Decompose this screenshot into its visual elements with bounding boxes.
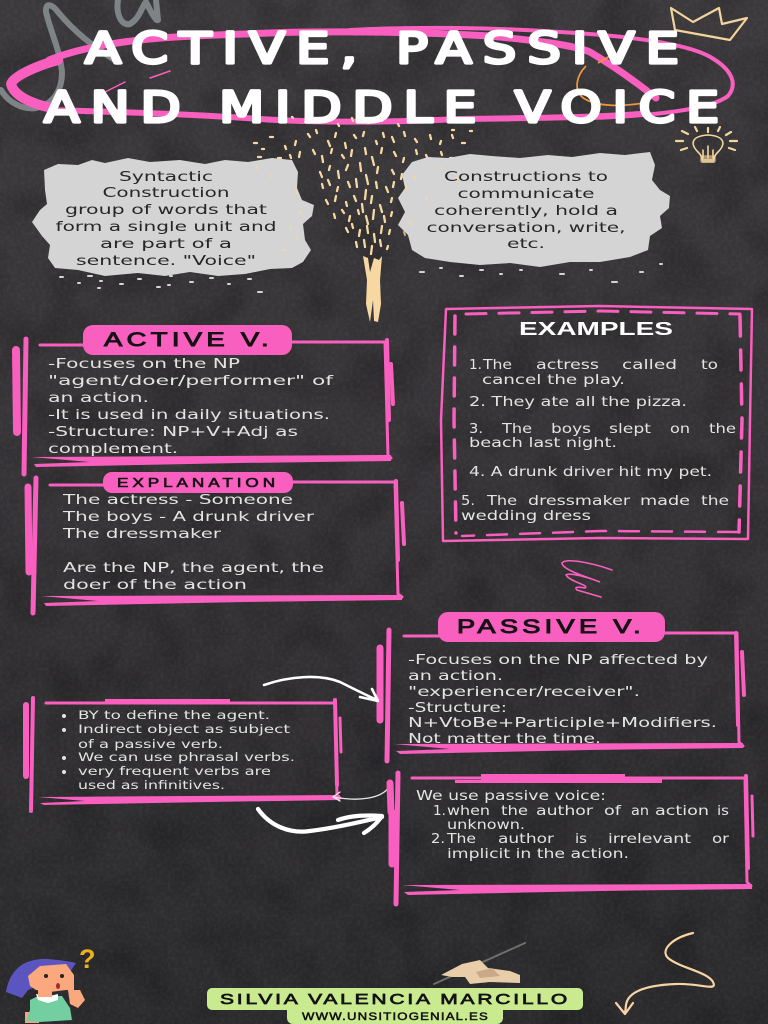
panel: passive voice [380, 612, 744, 761]
title: ACTIVE, PASSIVE [85, 24, 690, 74]
pink brush ellipse behind the title [11, 28, 733, 122]
text: example sentences: on [670, 421, 690, 437]
text: example sentences: boys [551, 421, 591, 437]
text: explanation: The dressmaker [62, 526, 222, 542]
text: active voice description: an action. [48, 390, 149, 406]
heading: explanation: EXPLANATION [117, 475, 279, 490]
text: usage list: irrelevant [608, 832, 691, 847]
heading: examples: EXAMPLES [519, 319, 673, 339]
icon: thinking girl [6, 959, 85, 1023]
text: usage list: when [447, 804, 490, 819]
text: usage list: author [498, 832, 555, 847]
panel: syntactic construction: are part of a [100, 236, 232, 252]
text: example sentences: The [486, 493, 517, 509]
heading: active v.: ACTIVE V. [104, 330, 273, 351]
heading: active v. [83, 325, 292, 355]
text: explanation [62, 492, 324, 593]
gold paint splatter [254, 117, 472, 254]
text: example sentences: 1. [469, 357, 482, 373]
text: example sentences: 2. They ate all the pizza. [469, 394, 687, 410]
panel: passive voice usage [390, 773, 753, 904]
text: example sentences: wedding dress [461, 508, 591, 524]
text: feature bullets [62, 708, 295, 792]
text: usage list: implicit in the action. [447, 847, 629, 862]
orange accent curve [577, 56, 644, 105]
text: explanation: Are the NP, the agent, the [63, 560, 324, 576]
text: feature bullets: We can use phrasal verbs. [78, 750, 295, 764]
text: example sentences: dressmaker [528, 493, 631, 509]
text: usage list: is [717, 804, 729, 819]
text: example sentences: cancel the play. [482, 372, 625, 388]
arrow: to passive panel [264, 677, 378, 701]
panel: communicative constructions: communicate [458, 186, 594, 202]
text: passive voice description [408, 652, 717, 747]
text: explanation: doer of the action [63, 577, 247, 593]
panel: syntactic construction [32, 158, 314, 276]
text: feature bullets: very frequent verbs are [78, 764, 271, 778]
text: usage list: action [655, 804, 709, 819]
panel: communicative constructions: coherently, hold a [434, 203, 618, 219]
panel: communicative constructions [398, 152, 670, 267]
panel: syntactic construction: Syntactic [119, 169, 213, 185]
icon: light bulb [676, 127, 737, 162]
panel: active voice [16, 325, 393, 474]
heading: passive v. [438, 612, 665, 642]
text: example sentences: 4. A drunk driver hit my pet. [469, 464, 712, 480]
panel: communicative constructions: etc. [507, 236, 545, 252]
grey scribble decoration [1, 0, 158, 108]
text: feature bullets: used as infinitives. [78, 778, 225, 792]
text: usage list: author [536, 804, 594, 819]
text: example sentences: 5. [461, 493, 475, 509]
text: usage list: the [501, 804, 528, 819]
arrow: thick curve to usage panel [258, 809, 382, 833]
text: active voice description: -Focuses on the NP [48, 356, 240, 372]
text: example sentences: called [622, 357, 677, 373]
panel: communicative constructions: conversation, write, [426, 220, 626, 236]
text: active voice description: -Structure: NP+V+Adj as [48, 424, 298, 440]
text: usage list [416, 789, 730, 862]
text: usage list: unknown. [447, 818, 525, 833]
author name tag: WWW.UNSITIOGENIAL.ES [302, 1011, 489, 1023]
paint drip stem [363, 256, 382, 322]
text: feature bullets: BY to define the agent. [78, 708, 270, 722]
panel: syntactic construction: form a single unit and [56, 219, 276, 235]
panel: passive voice features [26, 698, 341, 811]
text: example sentences: The [482, 357, 512, 373]
panel: communicative constructions: Constructions to [444, 169, 608, 185]
text: example sentences: slept [609, 421, 651, 437]
text: usage list: is [575, 832, 587, 847]
text: usage list: 1. [433, 804, 446, 819]
heading: explanation [103, 472, 293, 493]
text: usage list: of [604, 804, 622, 819]
text: passive voice description: Not matter the time. [408, 731, 601, 747]
text: usage list: 2. [431, 832, 445, 847]
text: active voice description: complement. [48, 441, 178, 457]
gold splatter over panels [256, 168, 458, 250]
icon: hand with pen [434, 943, 525, 984]
text: usage list: The [446, 832, 476, 847]
text: example sentences [461, 357, 736, 524]
text: example sentences: the [701, 493, 729, 509]
text: passive voice description: an action. [408, 668, 503, 684]
panel: syntactic construction: group of words that [65, 202, 267, 218]
text: example sentences: made [640, 493, 690, 509]
text: explanation: The actress - Someone [62, 492, 293, 508]
text: passive voice description: "experiencer/receiver". [408, 684, 640, 700]
text: explanation: The boys - A drunk driver [62, 509, 315, 525]
panel: syntactic construction: Construction [102, 185, 230, 201]
panel: syntactic construction: sentence. "Voice" [76, 253, 256, 269]
heading: passive v.: PASSIVE V. [457, 617, 645, 638]
icon: question mark: ? [79, 944, 96, 974]
text: example sentences: actress [536, 357, 599, 373]
text: example sentences: The [501, 421, 532, 437]
text: active voice description [48, 356, 335, 457]
arrow: thin curve to features [333, 787, 389, 801]
text: example sentences: to [701, 357, 718, 373]
arrow: gold squiggle [616, 933, 714, 1014]
text: example sentences: 3. [469, 421, 483, 437]
text: feature bullets: Indirect object as subject [78, 722, 291, 736]
text: passive voice description: -Focuses on the NP affected by [408, 652, 708, 668]
author name tag [207, 988, 583, 1024]
text: usage list: or [712, 832, 730, 847]
text: usage list: an [631, 804, 649, 819]
icon: crown [671, 8, 747, 40]
text: usage list: We use passive voice: [416, 789, 606, 804]
text: example sentences: beach last night. [469, 435, 617, 451]
text: passive voice description: -Structure: [408, 700, 507, 716]
text: example sentences: the [709, 421, 736, 437]
text: active voice description: "agent/doer/performer" of [48, 373, 335, 389]
text: passive voice description: N+VtoBe+Participle+Modifiers. [408, 715, 717, 731]
panel: examples [441, 306, 752, 541]
title [44, 24, 730, 133]
text: feature bullets: of a passive verb. [78, 737, 223, 751]
pink squiggle [562, 561, 612, 597]
title: AND MIDDLE VOICE [44, 83, 730, 133]
panel: explanation [28, 472, 404, 613]
author name tag: SILVIA VALENCIA MARCILLO [220, 991, 570, 1008]
white splatter dots [60, 264, 662, 292]
text: active voice description: -It is used in daily situations. [48, 407, 330, 423]
